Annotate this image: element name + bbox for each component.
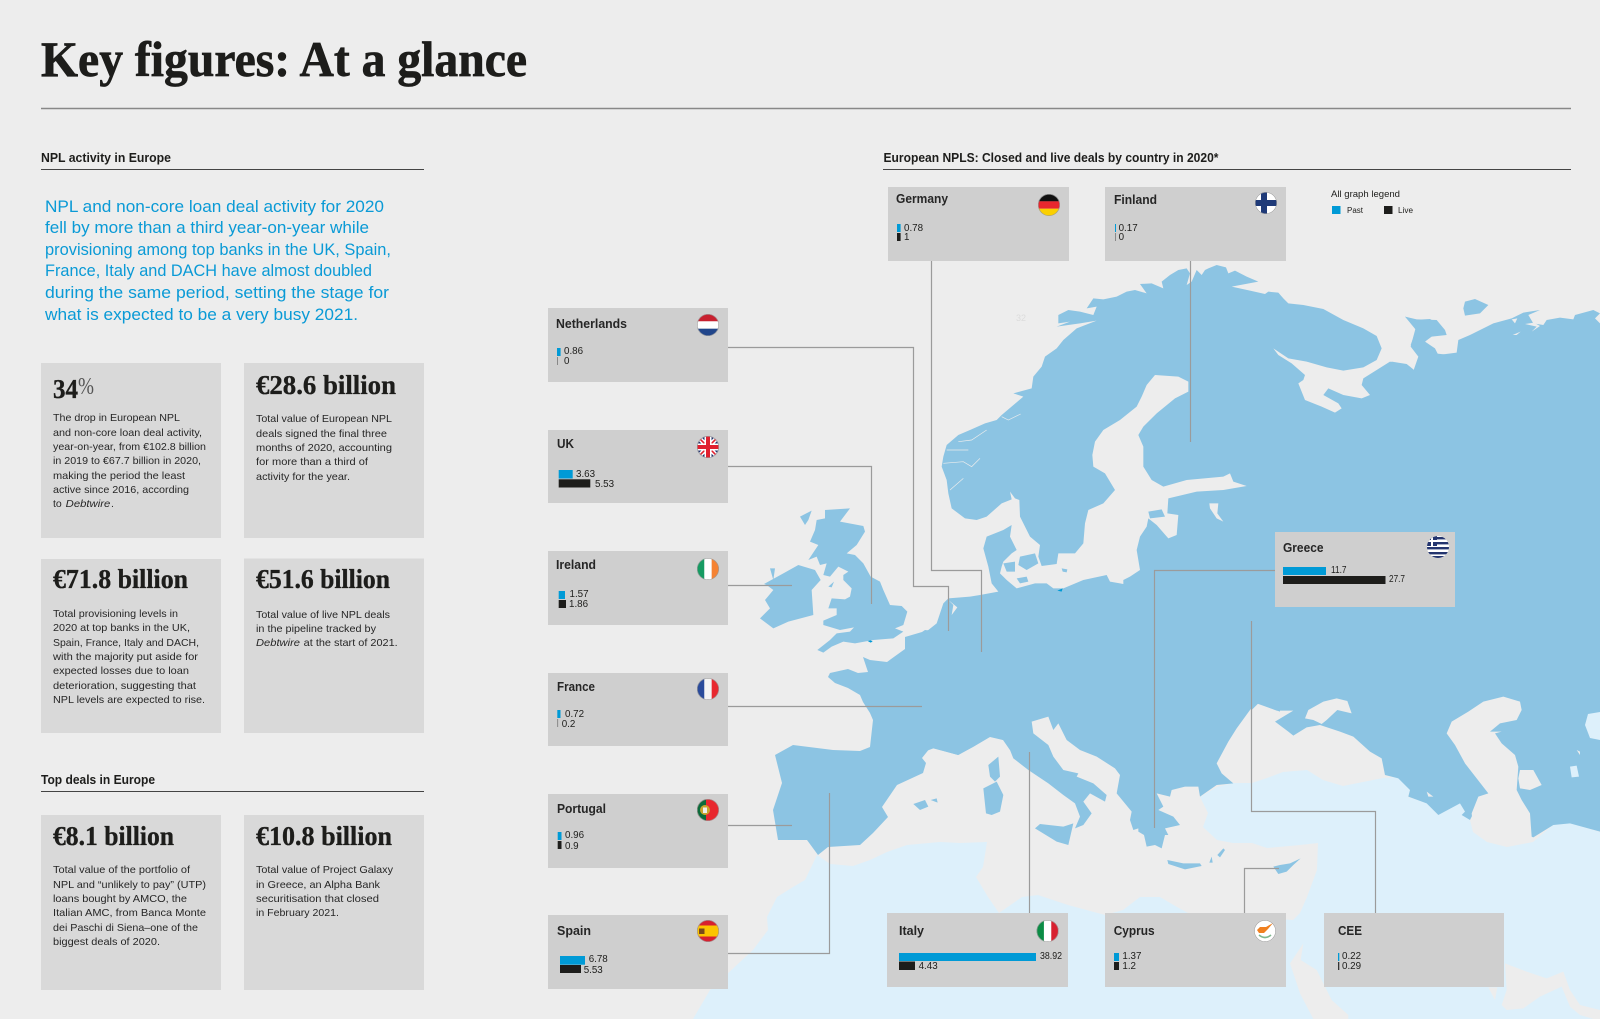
flag: Portugal — [697, 799, 719, 821]
country card: Greece — [1275, 532, 1455, 607]
country card: Finland — [1105, 187, 1286, 261]
country card: Greece: 11.7 — [1331, 565, 1346, 576]
country card: UK: 3.63 — [576, 469, 596, 480]
country card: Portugal: 0.96 — [565, 830, 585, 841]
key figure card: 34% — [41, 363, 221, 538]
key figure card: 34%: and non-core loan deal activity, — [53, 427, 202, 439]
intro paragraph: NPL and non-core loan deal activity for 2020 — [45, 197, 384, 216]
key figure card: €71.8 billion: NPL levels are expected to rise. — [53, 694, 205, 706]
map: Scandinavia, Finland and north-west Russia — [942, 265, 1450, 593]
flag: Netherlands — [697, 314, 719, 336]
country card: Spain: Spain — [557, 924, 591, 938]
country card: Cyprus: Cyprus — [1114, 924, 1155, 938]
key figure card: €71.8 billion — [41, 559, 221, 733]
map: Crete, Rhodes and Cyprus — [1167, 848, 1301, 874]
map: France, Benelux and Iberia — [773, 630, 1010, 855]
title: Key figures: At a glance — [41, 31, 527, 87]
country card: CEE: 0.29 — [1342, 961, 1361, 972]
country card: CEE: 0.22 — [1342, 951, 1361, 962]
map of Europe — [693, 265, 1600, 1019]
country card: Spain: 6.78 — [589, 954, 608, 965]
country card: Spain: 5.53 — [584, 965, 603, 976]
intro paragraph: what is expected to be a very busy 2021. — [44, 305, 358, 324]
country card: Finland: 0 — [1119, 232, 1125, 243]
key figure card: €51.6 billion: in the pipeline tracked by — [256, 623, 377, 635]
country card: CEE: CEE — [1338, 924, 1362, 938]
key figure card: €71.8 billion: €71.8 billion — [53, 564, 188, 594]
key figure card: €51.6 billion — [244, 558, 424, 733]
country card: Greece: 27.7 — [1389, 574, 1405, 585]
key figure card: 34%: % — [78, 374, 94, 400]
map: lake near the right edge — [1585, 712, 1600, 740]
key figure card: €8.1 billion: Italian AMC, from Banca Monte — [53, 907, 206, 919]
key figure card: €10.8 billion — [244, 815, 424, 990]
country card: Germany: 1 — [904, 232, 909, 243]
flag: UK — [697, 436, 719, 458]
key figure card: €71.8 billion: 2020 at top banks in the UK, — [53, 622, 190, 634]
country card: Finland: 0.17 — [1119, 223, 1138, 234]
country card: France: 0.72 — [565, 709, 584, 720]
country card: Netherlands: Netherlands — [556, 317, 627, 331]
key figure card: €10.8 billion: Total value of Project Galaxy — [256, 864, 394, 876]
intro paragraph: during the same period, setting the stage for — [45, 283, 389, 302]
country card: Ireland: 1.57 — [570, 589, 589, 600]
heading: European NPLS: European NPLS: Closed and live deals by country in 2020* — [884, 151, 1219, 165]
map: eastern Russia, Ukraine and Caucasus — [1250, 480, 1600, 847]
country card: France — [548, 673, 728, 746]
intro paragraph — [44, 197, 391, 324]
country card: Italy: 4.43 — [919, 961, 938, 972]
flag: Spain — [697, 920, 719, 942]
country card: Cyprus: 1.2 — [1122, 961, 1136, 972]
key figure card: €51.6 billion: at the start of 2021. — [304, 637, 398, 649]
key figure card: €10.8 billion: in February 2021. — [256, 907, 339, 919]
country card: Italy — [887, 913, 1068, 987]
flag: France — [697, 678, 719, 700]
key figure card: €51.6 billion: €51.6 billion — [256, 564, 390, 594]
key figure card: €8.1 billion: dei Paschi di Siena–one of the — [53, 922, 198, 934]
country card: Germany: Germany — [896, 192, 948, 206]
key figure card: €10.8 billion: in Greece, an Alpha Bank — [256, 879, 381, 891]
country card: UK — [548, 430, 728, 503]
key figure card: €28.6 billion: months of 2020, accounting — [256, 442, 392, 454]
key figure card: 34%: Debtwire — [66, 498, 110, 510]
legend — [1331, 189, 1414, 215]
country card: Ireland: 1.86 — [569, 599, 589, 610]
legend: Past — [1347, 206, 1364, 215]
legend: All graph legend — [1331, 189, 1400, 200]
flag: Italy — [1037, 920, 1059, 942]
country card: Germany — [888, 187, 1069, 261]
key figure card: €28.6 billion: deals signed the final three — [256, 428, 387, 440]
country card: Spain — [548, 915, 728, 989]
key figure card: €8.1 billion: €8.1 billion — [53, 821, 174, 851]
country card: Italy: Italy — [899, 924, 924, 938]
map: northern Russia — [1380, 299, 1600, 480]
country card: Portugal: Portugal — [557, 802, 606, 816]
country card: Greece: Greece — [1283, 541, 1324, 555]
country card: Portugal: 0.9 — [565, 841, 579, 852]
key figure card: €28.6 billion: activity for the year. — [256, 471, 350, 483]
key figure card: €8.1 billion: biggest deals of 2020. — [53, 936, 160, 948]
country card: France: France — [557, 680, 595, 694]
country card: Ireland: Ireland — [556, 558, 596, 572]
key figure card: €8.1 billion — [41, 815, 221, 990]
key figure card: €8.1 billion: loans bought by AMCO, the — [53, 893, 187, 905]
map: Balearic islands — [913, 798, 938, 810]
country card: Ireland — [548, 551, 728, 625]
country card: Cyprus: 1.37 — [1122, 951, 1141, 962]
country card: UK: UK — [557, 437, 574, 451]
key figure card: €71.8 billion: with the majority put aside for — [52, 651, 199, 663]
country card: Netherlands — [548, 308, 728, 382]
country card: Italy: 38.92 — [1040, 951, 1062, 962]
key figure card: 34%: to — [53, 498, 62, 510]
key figure card: €28.6 billion: Total value of European NPL — [256, 413, 392, 425]
country card: CEE — [1324, 913, 1504, 987]
key figure card: 34%: making the period the least — [53, 470, 185, 482]
map: Red Sea and Persian Gulf — [1290, 943, 1600, 1019]
country card: Germany: 0.78 — [904, 223, 924, 234]
heading: Top deals in Europe: Top deals in Europe — [41, 773, 155, 787]
key figure card: €10.8 billion: securitisation that closed — [256, 893, 379, 905]
map: page number ghost: 32 — [1016, 313, 1026, 323]
key figure card: €71.8 billion: expected losses due to loan — [53, 665, 189, 677]
connector lines — [727, 261, 1376, 954]
key figure card: €8.1 billion: Total value of the portfolio of — [53, 864, 190, 876]
intro paragraph: provisioning among top banks in the UK, Spain, — [45, 240, 391, 259]
intro paragraph: France, Italy and DACH have almost doubled — [45, 261, 372, 280]
country card: Netherlands: 0 — [564, 356, 570, 367]
country card: Netherlands: 0.86 — [564, 346, 584, 357]
country card: UK: 5.53 — [595, 479, 615, 490]
key figure card: 34%: in 2019 to €67.7 billion in 2020, — [53, 455, 201, 467]
key figure card: 34%: The drop in European NPL — [53, 412, 180, 424]
map: Africa and Middle East — [693, 770, 1600, 1019]
key figure card: €71.8 billion: deterioration, suggesting that — [53, 680, 196, 692]
country card: Finland: Finland — [1114, 193, 1157, 207]
flag: Greece — [1427, 536, 1449, 558]
key figure card: 34%: active since 2016, according — [53, 484, 189, 496]
map: Great Britain — [800, 508, 907, 653]
map: Ireland — [760, 565, 821, 628]
heading: NPL activity in Europe: NPL activity in Europe — [41, 151, 171, 165]
key figure card: €28.6 billion: for more than a third of — [256, 456, 368, 468]
key figure card: €71.8 billion: Spain, France, Italy and DACH, — [53, 637, 199, 649]
map: central Europe, Italy and the Balkans — [920, 525, 1280, 848]
key figure card: €51.6 billion: Total value of live NPL deals — [256, 609, 390, 621]
flag: Cyprus — [1254, 920, 1276, 942]
intro paragraph: fell by more than a third year-on-year while — [45, 218, 369, 237]
country card: France: 0.2 — [562, 719, 575, 730]
flag: Germany — [1038, 194, 1060, 216]
key figure card: €28.6 billion: €28.6 billion — [256, 370, 396, 400]
key figure card: €8.1 billion: NPL and “unlikely to pay” (UTP) — [53, 879, 206, 891]
key figure card: €51.6 billion: Debtwire — [256, 637, 300, 649]
key figure card: €28.6 billion — [244, 363, 424, 538]
key figure card: 34%: . — [111, 498, 114, 510]
flag: Ireland — [697, 558, 719, 580]
country card: Portugal — [548, 794, 728, 868]
flag: Finland — [1255, 192, 1277, 214]
key figure card: €10.8 billion: €10.8 billion — [256, 821, 392, 851]
legend: Live — [1398, 206, 1414, 215]
country card: Cyprus — [1105, 913, 1286, 987]
key figure card: 34%: year-on-year, from €102.8 billion — [53, 441, 206, 453]
key figure card: €71.8 billion: Total provisioning levels in — [53, 608, 178, 620]
key figure card: 34%: 34 — [53, 374, 78, 404]
